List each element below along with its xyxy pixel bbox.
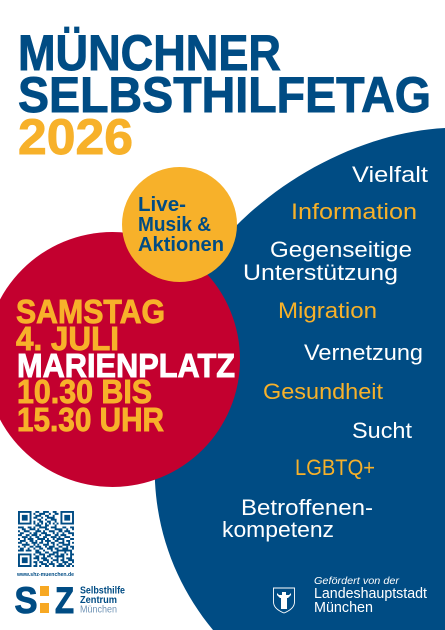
end time: 15.30 UHR: [17, 401, 164, 438]
topic: Sucht: Sucht: [352, 418, 413, 443]
city name: Landeshauptstadt: [314, 586, 427, 602]
website URL: www.shz-muenchen.de: [16, 572, 74, 578]
panel: blue curved background: [154, 128, 445, 630]
date: 4. JULI: [16, 320, 119, 357]
callout text: Musik &: [138, 214, 211, 236]
topic: Migration: Migration: [278, 298, 377, 323]
day: SAMSTAG: [16, 293, 165, 330]
funding line: Gefördert von der: [314, 576, 400, 587]
panel: yellow live music circle: [122, 167, 237, 282]
topic: Gesundheit: Gesundheit: [263, 379, 384, 404]
place: MARIENPLATZ: [17, 347, 235, 384]
callout text: Live-: [138, 194, 186, 216]
logo: Selbsthilfe Zentrum München: [14, 580, 125, 621]
QR code: [18, 511, 74, 567]
logo wordmark: [80, 586, 125, 616]
topic: LGBTQ+: LGBTQ+: [295, 455, 375, 480]
topic: Betroffenenkompetenz: kompetenz: [222, 517, 334, 542]
funding note: München: [314, 600, 373, 616]
start time: 10.30 BIS: [17, 373, 152, 410]
topic list: [222, 162, 429, 542]
logo mark S:Z: S: [14, 580, 38, 621]
callout text: Aktionen: [138, 234, 224, 256]
topic: Gegenseitige Unterstützung: Unterstützung: [243, 260, 398, 285]
title: [18, 25, 431, 165]
logo wordmark: München: [80, 604, 117, 616]
topic: Gegenseitige Unterstützung: Gegenseitige: [270, 237, 412, 262]
funding note: [314, 576, 427, 616]
icon: Munich coat of arms: [274, 588, 294, 613]
topic: Gegenseitige Unterstützung: [243, 237, 412, 285]
topic: Vielfalt: Vielfalt: [352, 162, 429, 187]
title line: Münchner: MÜNCHNER: [18, 25, 281, 81]
panel: red event circle: [0, 232, 240, 487]
topic: Information: Information: [291, 199, 417, 224]
logo wordmark: Zentrum: [80, 595, 117, 606]
logo wordmark: Selbsthilfe: [80, 586, 125, 596]
topic: Betroffenenkompetenz: Betroffenen-: [241, 495, 373, 520]
topic: Betroffenenkompetenz: [222, 495, 373, 542]
title year: 2026: [18, 109, 133, 165]
logo mark S:Z: Z: [55, 580, 74, 621]
callout text: [138, 194, 224, 256]
topic: Vernetzung: Vernetzung: [304, 340, 423, 365]
logo mark S:Z: [14, 580, 74, 621]
event date and place: [16, 293, 235, 438]
